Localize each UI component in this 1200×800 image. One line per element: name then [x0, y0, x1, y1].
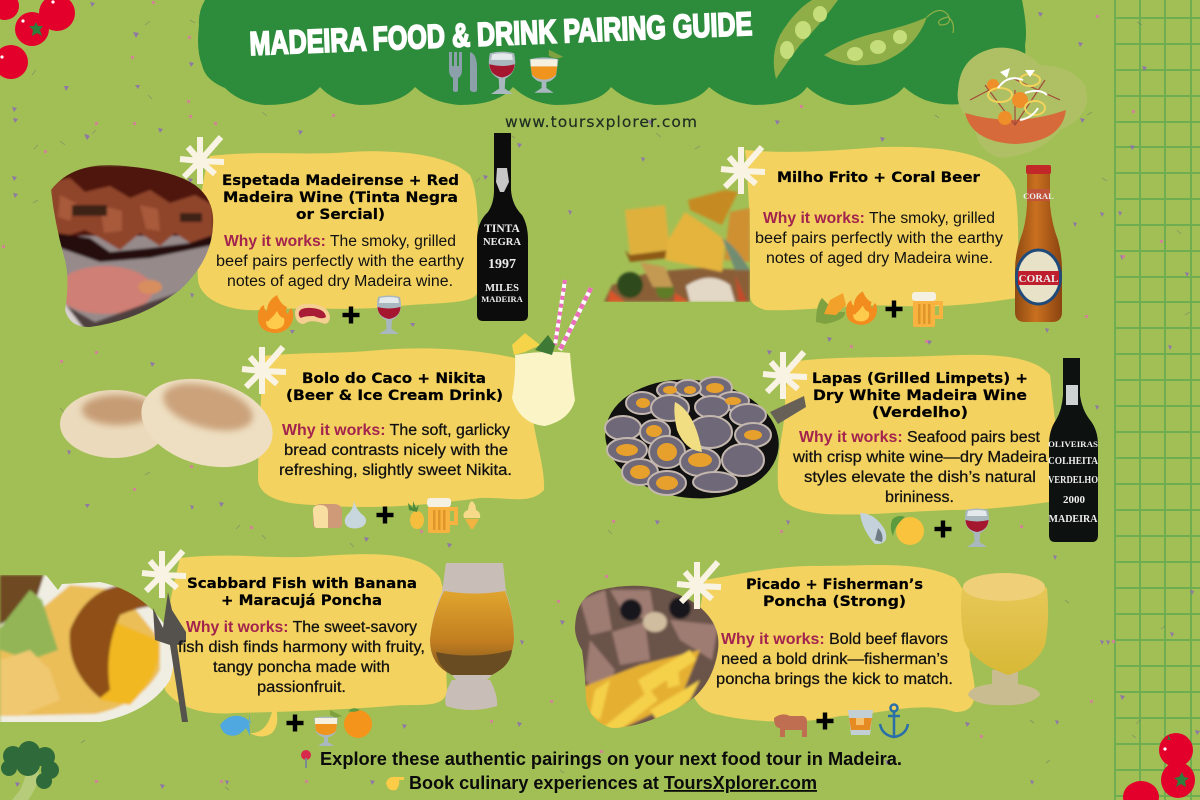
heading: Milho Frito + Coral Beer	[777, 170, 981, 186]
heading: Picado + Fisherman’s	[746, 577, 923, 593]
wine bottle: MILES	[485, 283, 519, 294]
broccoli	[1, 741, 59, 800]
wine bottle: OLIVEIRAS	[1048, 439, 1098, 449]
body text	[792, 429, 1048, 506]
icons: bread, garlic, plus, pineapple, beer, ice cream	[313, 498, 480, 533]
body text	[716, 631, 953, 688]
body text: Why it works: Seafood pairs best	[799, 429, 1041, 446]
wine bottle: COLHEITA	[1048, 456, 1099, 467]
heading	[812, 371, 1028, 421]
icons: ox, plus, whisky, anchor	[774, 704, 908, 737]
asterisk	[242, 347, 286, 394]
beer bottle: CORAL	[1019, 273, 1058, 285]
panel: bolo do caco	[60, 280, 591, 533]
asterisk	[721, 147, 765, 194]
heading: (Verdelho)	[872, 405, 968, 421]
photo: espetada	[50, 165, 215, 330]
body text: beef pairs perfectly with the earthy	[216, 253, 464, 270]
body text: with crisp white wine—dry Madeira	[792, 449, 1048, 466]
poncha glass	[430, 563, 514, 710]
heading: Madeira Wine (Tinta Negra	[223, 190, 458, 206]
heading: Scabbard Fish with Banana	[187, 576, 417, 592]
icon: pointing hand	[386, 777, 404, 790]
body text: refreshing, slightly sweet Nikita.	[279, 462, 512, 479]
title: MADEIRA FOOD & DRINK PAIRING GUIDE	[249, 5, 753, 62]
icon: pea pods	[774, 0, 953, 79]
fork	[153, 592, 188, 722]
body text: poncha brings the kick to match.	[716, 671, 953, 688]
card background	[258, 348, 544, 507]
wine bottle: 2000	[1063, 494, 1086, 506]
body text: Why it works: Bold beef flavors	[721, 631, 948, 648]
wine bottle: TINTA	[484, 223, 520, 235]
heading	[286, 371, 503, 404]
body text: fish dish finds harmony with fruity,	[178, 639, 425, 656]
beer bottle: CORAL	[1023, 191, 1054, 201]
icons: corn, fire, plus, beer	[816, 291, 943, 327]
panel: lapas	[599, 352, 1099, 547]
wine bottle: NEGRA	[483, 237, 521, 248]
header banner	[198, 0, 1026, 105]
heading: + Maracujá Poncha	[221, 593, 382, 609]
body text	[755, 210, 1003, 267]
card background	[690, 565, 975, 722]
panel: picado	[570, 562, 1048, 737]
heading: Poncha (Strong)	[763, 594, 906, 610]
body text: brininess.	[885, 489, 954, 506]
card background	[745, 147, 1018, 310]
panel: espetada	[50, 133, 528, 334]
heading: (Beer & Ice Cream Drink)	[286, 388, 503, 404]
photo: scabbard fish with banana	[0, 575, 180, 725]
photo: picado	[575, 586, 718, 728]
tomatoes bottom right	[1123, 733, 1195, 800]
body text: beef pairs perfectly with the earthy	[755, 230, 1003, 247]
heading: Bolo do Caco + Nikita	[302, 371, 486, 387]
grid pattern	[1114, 0, 1200, 800]
wine bottle: MADEIRA	[1048, 514, 1098, 525]
heading	[222, 173, 459, 223]
wine bottle	[477, 133, 528, 321]
card background	[198, 151, 478, 310]
wine bottle: VERDELHO	[1048, 475, 1098, 486]
nikita drink	[512, 280, 591, 426]
beer bottle	[1015, 165, 1062, 322]
footer line 2: Book culinary experiences at ToursXplorer.com	[409, 773, 817, 793]
card background	[778, 355, 1062, 515]
body text	[216, 233, 464, 290]
website url: www.toursxplorer.com	[505, 113, 697, 131]
footer call to action	[301, 749, 902, 793]
asterisk	[180, 137, 224, 184]
wine bottle: 1997	[488, 257, 516, 272]
icon: round pushpin	[301, 750, 311, 768]
icons: shell, lemon, plus, wine	[860, 508, 989, 547]
icons: fire, steak, plus, wine	[258, 295, 401, 334]
panel: milho frito	[604, 147, 1062, 327]
body text: Why it works: The smoky, grilled	[763, 210, 995, 227]
photo: bolo do caco bread	[60, 365, 283, 481]
body text: tangy poncha made with	[213, 659, 390, 676]
panel: scabbard fish	[0, 551, 514, 746]
heading: Dry White Madeira Wine	[813, 388, 1027, 404]
asterisk	[142, 551, 186, 598]
header icons: cutlery and glasses	[449, 50, 563, 94]
heading	[746, 577, 923, 610]
heading: Lapas (Grilled Limpets) +	[812, 371, 1028, 387]
body text: need a bold drink—fisherman’s	[721, 651, 948, 668]
photo: limpets pan	[599, 371, 806, 507]
asterisk	[677, 562, 721, 609]
body text	[279, 422, 512, 479]
heading: Espetada Madeirense + Red	[222, 173, 459, 189]
body text: notes of aged dry Madeira wine.	[227, 273, 453, 290]
body text: Why it works: The soft, garlicky	[282, 422, 510, 439]
body text: notes of aged dry Madeira wine.	[766, 250, 993, 267]
body text: styles elevate the dish’s natural	[804, 469, 1036, 486]
heading	[187, 576, 417, 609]
icon: salad	[958, 48, 1087, 158]
body text: Why it works: The smoky, grilled	[224, 233, 456, 250]
icons: fish, banana, plus, cocktail, orange	[220, 708, 372, 746]
body text: passionfruit.	[257, 679, 346, 696]
poncha goblet	[961, 573, 1048, 705]
tomatoes top left	[0, 0, 75, 79]
body text	[178, 619, 425, 696]
body text: bread contrasts nicely with the	[284, 442, 508, 459]
footer line 1: Explore these authentic pairings on your next food tour in Madeira.	[320, 749, 902, 769]
body text: Why it works: The sweet-savory	[186, 619, 417, 636]
heading: or Sercial)	[296, 207, 385, 223]
wine bottle	[1048, 358, 1099, 542]
photo: milho frito	[604, 190, 750, 302]
card background	[164, 554, 447, 713]
wine bottle: MADEIRA	[481, 294, 524, 304]
asterisk	[763, 352, 807, 399]
